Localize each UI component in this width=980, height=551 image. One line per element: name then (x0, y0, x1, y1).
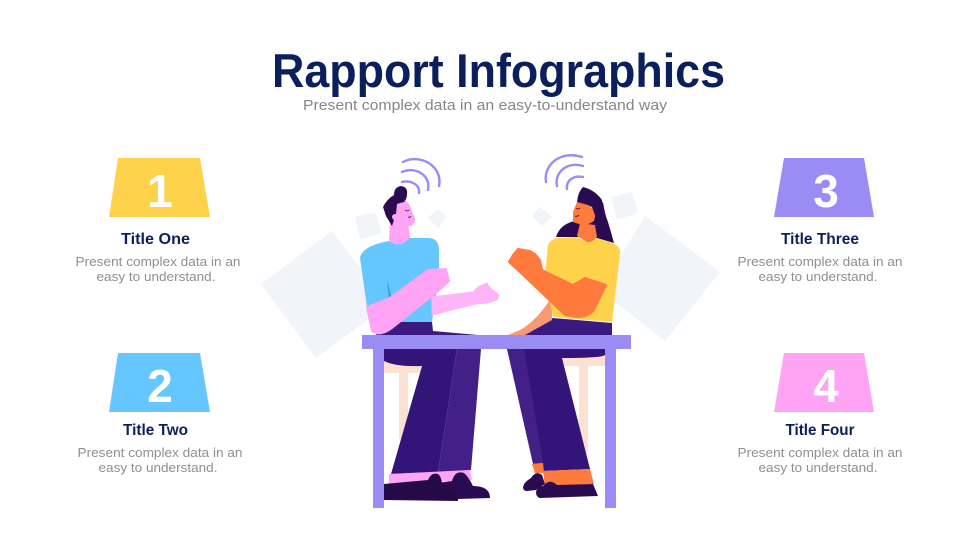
description one: Present complex data in an (76, 254, 240, 269)
description two: Present complex data in an (78, 445, 242, 460)
panel: title four (738, 353, 902, 475)
panel: title one (76, 158, 240, 284)
badge 1 (109, 158, 210, 217)
woman face (573, 202, 596, 226)
badge 4: 4 (813, 360, 839, 412)
man eye and mouth (405, 210, 411, 217)
subtitle: Present complex data in an easy-to-understand way (303, 97, 668, 114)
woman (508, 187, 620, 335)
man shirt (360, 238, 439, 322)
man ear (392, 214, 398, 220)
woman shirt (545, 237, 620, 322)
woman arm and hands (509, 249, 606, 317)
description three: easy to understand. (758, 269, 878, 284)
shirt fold (387, 279, 392, 301)
woman back hair (556, 202, 614, 243)
woman hair (577, 187, 602, 218)
woman lower arm (508, 296, 552, 335)
panel: title two (78, 353, 242, 475)
woman shoes (523, 473, 598, 498)
woman trousers (507, 349, 605, 486)
description four: easy to understand. (758, 460, 878, 475)
description three: Present complex data in an (738, 254, 902, 269)
woman trousers top (523, 318, 612, 335)
title: Rapport Infographics (272, 44, 725, 97)
man hair (383, 186, 407, 226)
man trousers top (376, 322, 478, 335)
woman eye and mouth (575, 208, 580, 216)
badge 4 (774, 353, 874, 412)
badge 2: 2 (147, 360, 173, 412)
illustration: two people talking at a table (261, 155, 720, 508)
description one: easy to understand. (96, 269, 216, 284)
woman neck (577, 223, 597, 242)
description four: Present complex data in an (738, 445, 902, 460)
table (362, 335, 631, 508)
badge 2 (109, 353, 210, 412)
man arms (367, 269, 499, 333)
man (360, 186, 499, 335)
man shoes (384, 472, 490, 501)
heading: title four: Title Four (786, 422, 854, 439)
heading: title two: Title Two (123, 422, 188, 439)
man trousers (384, 349, 481, 484)
badge 1: 1 (147, 165, 173, 217)
background squares (261, 192, 720, 358)
badge 3 (774, 158, 874, 217)
heading: title three: Title Three (781, 231, 859, 248)
panel: title three (738, 158, 902, 284)
man face (392, 201, 415, 227)
heading: title one: Title One (121, 231, 190, 248)
signal arcs (402, 155, 583, 193)
badge 3: 3 (813, 165, 839, 217)
man neck (389, 222, 410, 246)
stools (384, 356, 605, 452)
description two: easy to understand. (98, 460, 218, 475)
